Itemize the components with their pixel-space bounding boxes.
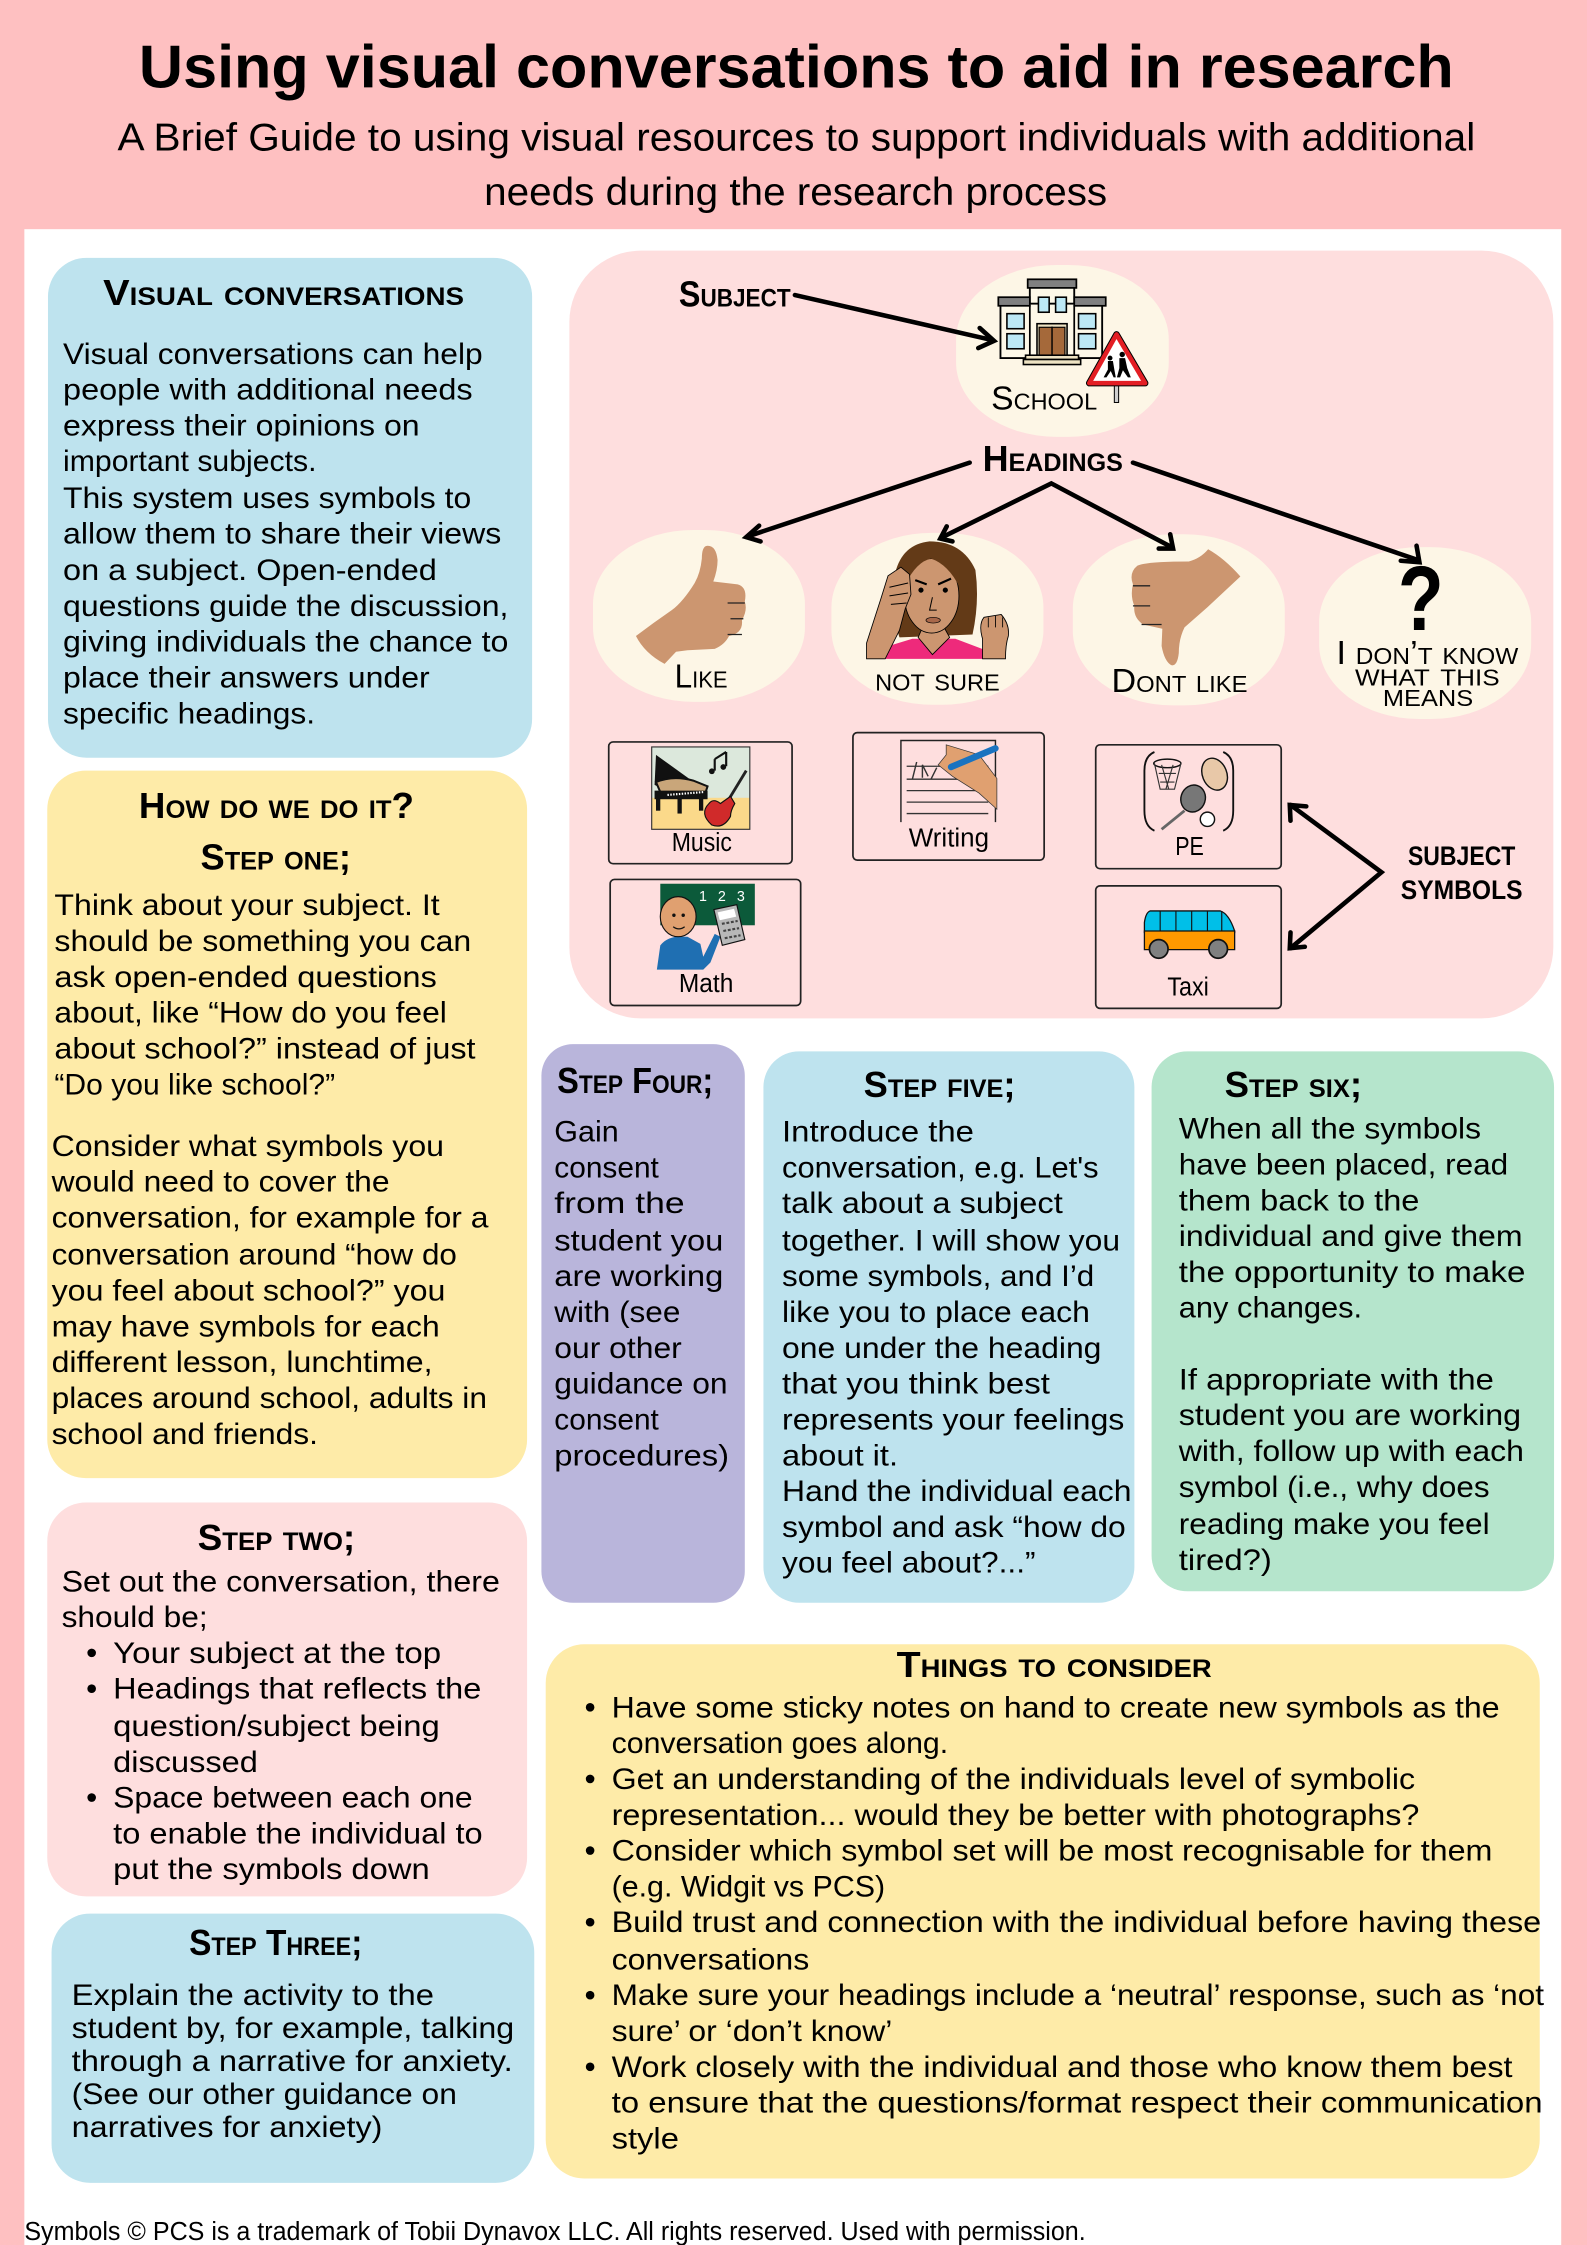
list: step two bullets <box>87 1637 483 1886</box>
arrow: headings to like <box>746 463 970 541</box>
card: music <box>609 742 792 864</box>
list: things to consider bullets: representation... would they be better with photographs? <box>612 1799 1419 1832</box>
icon: school building <box>998 279 1106 365</box>
heading: step two: Step two; <box>198 1518 355 1558</box>
heading: how do we do it: How do we do it? <box>139 786 414 826</box>
list: things to consider bullets: Have some sticky notes on hand to create new symbols as the <box>612 1691 1500 1724</box>
text: visual conversations intro: Visual conversations can help <box>63 338 483 371</box>
list: things to consider bullets: (e.g. Widgit vs PCS) <box>612 1870 885 1903</box>
label: taxi: Taxi <box>1167 973 1209 1001</box>
text: step four body: student you <box>554 1224 723 1257</box>
text: step four body: Gain <box>554 1116 619 1149</box>
icon: thumbs down <box>1132 549 1240 665</box>
text: step one symbols: places around school, adults in <box>52 1382 487 1415</box>
text: step three body: through a narrative for anxiety. <box>72 2045 513 2078</box>
text: step five body: symbol and ask “how do <box>782 1511 1126 1544</box>
text: visual conversations intro: specific headings. <box>63 697 315 730</box>
text: step one symbols: different lesson, lunchtime, <box>52 1346 433 1379</box>
text: step five body: Introduce the <box>782 1116 974 1149</box>
list: things to consider bullets: conversations <box>612 1943 809 1976</box>
text: step four body: guidance on <box>554 1368 728 1401</box>
list: step two bullets: Your subject at the top <box>113 1637 441 1670</box>
label: headings: Headings <box>983 439 1123 479</box>
text: step one subject <box>54 889 476 1101</box>
heading: step one: Step one; <box>201 837 351 877</box>
text: step five body: that you think best <box>782 1368 1051 1401</box>
label: i dont know what this means <box>1336 634 1519 713</box>
label: music: Music <box>672 829 732 857</box>
text: step one symbols: you feel about school?” you <box>52 1275 445 1308</box>
label: i dont know what this means: what this <box>1355 655 1500 692</box>
title: Using visual conversations to aid in research <box>139 33 1454 100</box>
text: step one subject: Think about your subject. It <box>54 889 440 922</box>
list: step two bullets: discussed <box>113 1746 258 1779</box>
label: subject symbols: SYMBOLS <box>1401 874 1523 905</box>
list: step two bullets: Headings that reflects the <box>113 1673 481 1706</box>
label: pe: PE <box>1175 833 1204 861</box>
panel: step three <box>52 1914 534 2183</box>
icon: writing <box>901 741 997 822</box>
panel: visual conversations <box>48 258 532 758</box>
list: things to consider bullets: style <box>612 2122 679 2155</box>
symbol: school <box>956 265 1169 437</box>
text: step five body: about it. <box>782 1439 898 1472</box>
icon: math teacher <box>657 884 755 970</box>
text: step three body <box>72 1979 514 2144</box>
list: things to consider bullets: Consider which symbol set will be most recognisable for them <box>612 1835 1492 1868</box>
text: step four body: with (see <box>553 1296 680 1329</box>
panel: example conversation diagram <box>569 251 1553 1018</box>
subtitle <box>117 116 1475 214</box>
label: subject: Subject <box>679 275 791 315</box>
label: like: Like <box>675 658 728 695</box>
label: school: School <box>991 380 1097 417</box>
text: step five body: talk about a subject <box>782 1187 1063 1220</box>
panel: step four <box>541 1044 745 1603</box>
text: step six follow up: symbol (i.e., why does <box>1179 1471 1490 1504</box>
heading: things to consider: Things to consider <box>897 1645 1212 1685</box>
list: things to consider bullets: Build trust and connection with the individual before having these <box>612 1906 1541 1939</box>
card: taxi <box>1096 886 1281 1008</box>
text: visual conversations intro: place their answers under <box>63 662 430 695</box>
text: step five body: one under the heading <box>782 1332 1101 1365</box>
heading: step four: Step Four; <box>557 1061 713 1101</box>
text: visual conversations intro <box>63 338 508 730</box>
text: step one symbols: conversation, for example for a <box>52 1201 489 1234</box>
list: step two bullets: to enable the individual to <box>113 1817 483 1850</box>
label: subject symbols: SUBJECT <box>1408 840 1516 871</box>
text: step six follow up: student you are working <box>1179 1399 1521 1432</box>
list: step two bullets: Space between each one <box>113 1782 473 1815</box>
text: step five body: conversation, e.g. Let's <box>782 1151 1099 1184</box>
text: step three body: student by, for example, talking <box>72 2012 514 2045</box>
icon: thumbs up <box>636 546 746 664</box>
text: step one symbols: school and friends. <box>52 1418 318 1451</box>
label: i dont know what this means: means <box>1383 676 1473 713</box>
text: visual conversations intro: on a subject. Open-ended <box>63 554 437 587</box>
text: step six follow up: reading make you feel <box>1179 1508 1490 1541</box>
panel: how do we do it / step one <box>47 771 527 1478</box>
icon: bus <box>1144 911 1235 958</box>
heading: step five: Step five; <box>864 1065 1016 1105</box>
arrow: headings to not sure and dont like <box>940 483 1173 549</box>
card: writing <box>853 733 1044 860</box>
text: step four body: consent <box>554 1403 660 1436</box>
text: step one subject: “Do you like school?” <box>54 1068 335 1101</box>
text: step one symbols <box>51 1130 489 1451</box>
arrow: subject to school <box>795 295 994 348</box>
text: step three body: Explain the activity to the <box>72 1979 434 2012</box>
text: step four body <box>553 1116 729 1472</box>
text: step four body: are working <box>554 1260 723 1293</box>
list: things to consider bullets: Get an understanding of the individuals level of symbolic <box>612 1763 1415 1796</box>
card: pe <box>1096 745 1281 869</box>
icon: question mark: ? <box>1398 548 1444 650</box>
label: math: Math <box>679 970 733 998</box>
text: step four body: from the <box>554 1187 685 1220</box>
label: subject symbols <box>1401 840 1523 905</box>
text: step two intro: Set out the conversation, there <box>62 1565 500 1598</box>
text: step one subject: should be something you can <box>54 925 471 958</box>
list: things to consider bullets: sure’ or ‘don’t know’ <box>612 2015 892 2048</box>
text: step three body: narratives for anxiety) <box>72 2111 382 2144</box>
text: visual conversations intro: giving individuals the chance to <box>63 626 508 659</box>
text: step four body: procedures) <box>554 1439 729 1472</box>
text: step six follow up: If appropriate with the <box>1179 1363 1494 1396</box>
text: step six read back <box>1179 1113 1525 1325</box>
text: step one symbols: would need to cover the <box>51 1166 390 1199</box>
panel: things to consider <box>546 1644 1545 2179</box>
label: not sure: not sure <box>875 660 1000 697</box>
heading: step six: Step six; <box>1225 1065 1362 1105</box>
text: step four body: consent <box>554 1151 660 1184</box>
label: i dont know what this means: I don’t know <box>1336 634 1519 671</box>
text: step six follow up <box>1178 1363 1524 1577</box>
text: step one subject: about school?” instead of just <box>54 1032 476 1065</box>
subtitle: needs during the research process <box>484 171 1107 214</box>
heading: step three: Step Three; <box>189 1923 362 1963</box>
text: step five body: you feel about?...” <box>782 1547 1036 1580</box>
text: step one symbols: may have symbols for each <box>52 1310 440 1343</box>
text: step six read back: individual and give them <box>1179 1220 1523 1253</box>
text: step six follow up: tired?) <box>1179 1544 1272 1577</box>
list: things to consider bullets: Make sure your headings include a ‘neutral’ response, such as ‘not <box>612 1979 1545 2012</box>
list: step two bullets: put the symbols down <box>113 1853 430 1886</box>
symbol: i dont know <box>1319 547 1531 719</box>
text: step six read back: any changes. <box>1179 1292 1362 1325</box>
text: step four body: our other <box>554 1332 682 1365</box>
label: writing: Writing <box>909 824 989 852</box>
text: visual conversations intro: important subjects. <box>63 445 317 478</box>
symbol: dont like <box>1073 534 1285 705</box>
text: visual conversations intro: allow them to share their views <box>63 518 501 551</box>
symbol: not sure <box>831 533 1043 705</box>
text: step six read back: have been placed, read <box>1179 1148 1508 1181</box>
arrow: headings to i dont know <box>1133 463 1419 562</box>
text: step two intro <box>62 1565 500 1634</box>
text: step five body: like you to place each <box>782 1296 1090 1329</box>
list: things to consider bullets: conversation goes along. <box>612 1727 948 1760</box>
icon: school warning sign <box>1089 334 1145 402</box>
text: step six follow up: with, follow up with each <box>1178 1435 1524 1468</box>
text: step two intro: should be; <box>62 1601 208 1634</box>
text: step five body <box>782 1116 1132 1580</box>
text: step one subject: about, like “How do you feel <box>54 997 447 1030</box>
text: step five body: together. I will show you <box>782 1224 1120 1257</box>
list: things to consider bullets: to ensure that the questions/format respect their communication <box>612 2087 1543 2120</box>
card: math <box>610 879 801 1005</box>
subtitle: A Brief Guide to using visual resources to support individuals with additional <box>117 116 1475 159</box>
icon: sports <box>1144 752 1233 831</box>
text: step one subject: ask open-ended questions <box>54 961 437 994</box>
text: visual conversations intro: people with additional needs <box>63 374 473 407</box>
text: step five body: Hand the individual each <box>782 1475 1132 1508</box>
text: visual conversations intro: questions guide the discussion, <box>63 590 508 623</box>
heading: visual conversations: Visual conversations <box>103 273 464 313</box>
panel: step six <box>1152 1051 1554 1591</box>
icon: music <box>652 747 750 829</box>
panel: step five <box>763 1051 1134 1603</box>
text: step five body: some symbols, and I’d <box>782 1260 1094 1293</box>
text: step one symbols: Consider what symbols you <box>52 1130 444 1163</box>
list: things to consider bullets <box>586 1691 1545 2155</box>
text: step five body: represents your feelings <box>782 1403 1124 1436</box>
arrow: subject symbols to pe and taxi <box>1290 805 1381 948</box>
panel: step two <box>47 1502 527 1896</box>
text: step six read back: When all the symbols <box>1179 1113 1481 1146</box>
icon: math teacher: 1 2 3 <box>699 889 745 905</box>
icon: thinking person <box>867 541 1009 659</box>
list: things to consider bullets: Work closely with the individual and those who know them best <box>612 2051 1513 2084</box>
label: dont like: Dont like <box>1111 662 1248 699</box>
text: visual conversations intro: express their opinions on <box>63 409 420 442</box>
symbol: like <box>593 530 805 702</box>
text: visual conversations intro: This system uses symbols to <box>63 482 471 515</box>
text: step one symbols: conversation around “how do <box>52 1239 457 1272</box>
list: step two bullets: question/subject being <box>113 1710 440 1743</box>
text: step six read back: the opportunity to make <box>1179 1256 1525 1289</box>
text: step six read back: them back to the <box>1179 1184 1419 1217</box>
text: step three body: (See our other guidance on <box>72 2078 457 2111</box>
